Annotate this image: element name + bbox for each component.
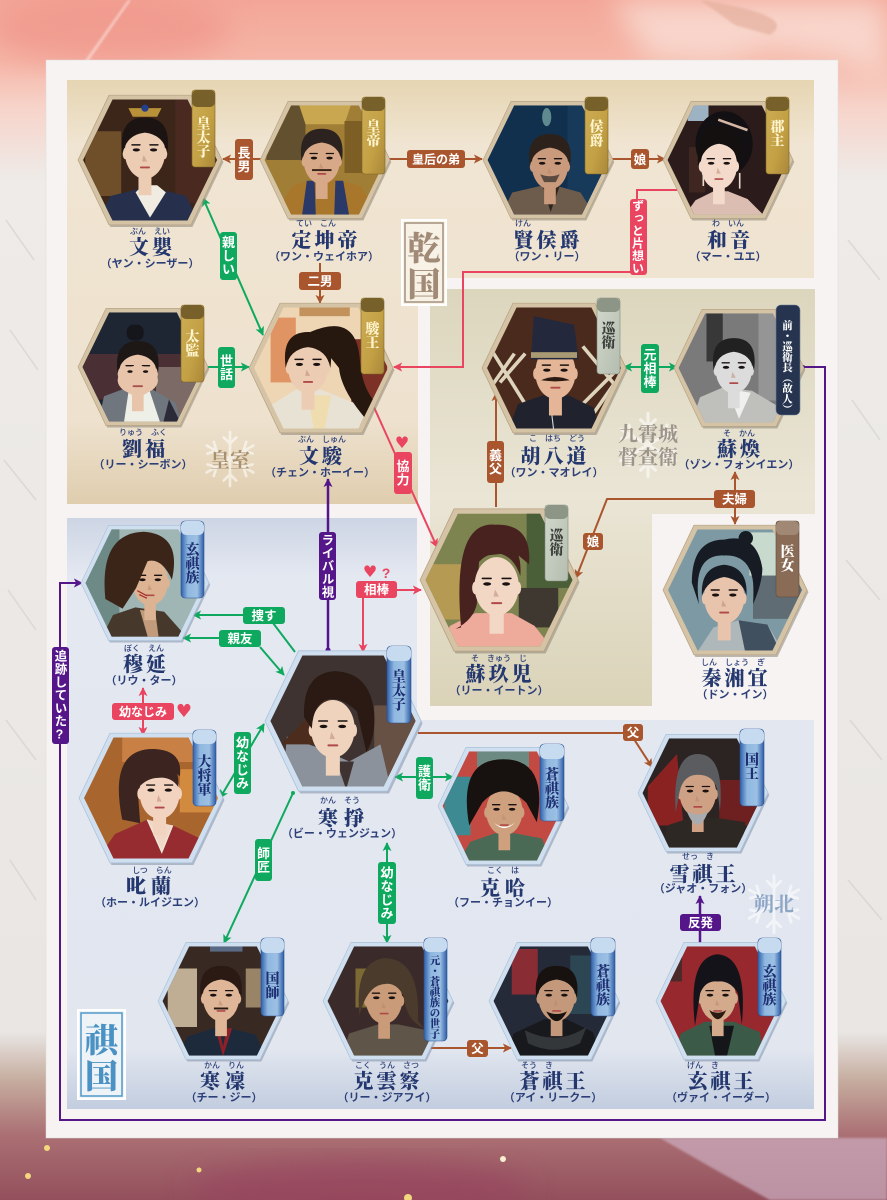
rank tag: 玄祺族 xyxy=(760,964,776,1007)
name: かん そう xyxy=(320,795,360,805)
name: そ きゅう じ xyxy=(471,653,527,663)
name xyxy=(450,653,548,697)
connector: 父 to 雪祺王: 父 xyxy=(627,726,640,740)
character: 定坤帝 xyxy=(260,97,391,263)
name xyxy=(94,427,192,471)
connector: 師匠: 師匠 xyxy=(255,846,270,874)
panel: Qi kingdom xyxy=(67,518,814,1109)
name: こ はち どう xyxy=(529,433,585,443)
name: （リー・シーボン） xyxy=(94,458,192,471)
section label: 九霄城督査衛: 九霄城 xyxy=(618,422,678,446)
connector: 幼なじみ red: ♥ xyxy=(176,701,192,722)
rank tag: 巡衛 xyxy=(600,321,616,350)
portrait xyxy=(323,942,454,1061)
connector: 夫婦 xyxy=(576,472,755,578)
portrait xyxy=(260,102,391,220)
name: けん xyxy=(515,219,531,228)
name: 定坤帝 xyxy=(292,229,360,252)
character: 賢侯爵 xyxy=(483,97,614,263)
name: 文嬰 xyxy=(129,236,175,259)
connector: 協力: ♥ xyxy=(395,433,409,452)
name xyxy=(696,657,774,701)
connector: 幼なじみ green xyxy=(220,724,264,798)
rank tag xyxy=(424,938,447,1041)
connector: 夫婦: 夫婦 xyxy=(722,492,747,506)
name: 蘇煥 xyxy=(717,438,763,461)
connector: 世話: 世話 xyxy=(218,354,233,382)
portrait xyxy=(674,310,805,428)
name: （マー・ユエ） xyxy=(690,250,766,263)
name: 克雲察 xyxy=(354,1069,422,1093)
name: （リウ・ター） xyxy=(106,674,182,687)
section label: 九霄城督査衛 xyxy=(618,414,678,476)
connector: 父 to 雪祺王 xyxy=(418,724,652,767)
character: 胡八道 xyxy=(482,298,627,479)
connector: 娘: 娘 xyxy=(634,152,647,167)
portrait xyxy=(79,733,224,865)
name: こく は xyxy=(487,866,519,875)
rank tag xyxy=(776,521,799,597)
rank tag: 皇太子 xyxy=(194,115,210,158)
name: （ワン・ウェイホア） xyxy=(269,250,379,263)
name: 和音 xyxy=(707,228,753,252)
name xyxy=(95,866,205,909)
rank tag: 前・巡衛長（故人） xyxy=(780,319,792,414)
name: 叱蘭 xyxy=(126,875,176,898)
connector: 父 to 蒼祺王: 父 xyxy=(471,1042,484,1056)
connector: 幼なじみ vertical xyxy=(378,843,396,943)
name: そ かん xyxy=(723,429,755,438)
connector: 片想い: ずっと片想い xyxy=(630,198,644,274)
panel: Jiuxiao city inspectorate xyxy=(430,289,815,706)
name: （ビー・ウェンジュン） xyxy=(282,826,402,840)
connector: ライバル視: ライバル視 xyxy=(320,534,334,598)
name: せっ き xyxy=(682,852,714,861)
character: 文駿 xyxy=(249,298,394,479)
rank tag xyxy=(585,97,608,174)
character: 寒掙 xyxy=(265,646,423,840)
name xyxy=(106,643,182,687)
name: げん き xyxy=(687,1060,719,1070)
name xyxy=(508,219,586,263)
name: しつ らん xyxy=(132,866,172,875)
name: 文駿 xyxy=(299,445,345,468)
character: 穆延 xyxy=(81,521,210,687)
name: 劉福 xyxy=(122,437,168,461)
label: pursuit: 追跡していた? xyxy=(52,648,67,742)
section label: 乾国: 国 xyxy=(408,267,440,304)
character: 劉福 xyxy=(78,305,209,471)
rank tag: 元・蒼祺族の世子 xyxy=(428,954,440,1039)
name: ぶん しゅん xyxy=(298,435,346,444)
rank tag xyxy=(387,646,411,723)
character: 秦湘宜 xyxy=(663,521,808,701)
rank tag: 皇太子 xyxy=(390,668,406,711)
purple border connector: pursuit xyxy=(52,365,825,1120)
name: 寒凜 xyxy=(200,1069,250,1093)
rank tag: 侯爵 xyxy=(588,118,604,148)
rank tag xyxy=(181,521,204,598)
connector: 元相棒 xyxy=(624,344,677,393)
name: （ワン・マオレイ） xyxy=(504,466,604,479)
rank tag xyxy=(192,90,215,167)
section label: 祺国 xyxy=(78,1010,125,1099)
connector: 親友 xyxy=(183,630,284,675)
rank tag xyxy=(758,938,781,1016)
name: てい こん xyxy=(296,219,336,228)
name: かん りん xyxy=(204,1061,244,1070)
name: 賢侯爵 xyxy=(514,228,582,252)
connector: 長男 xyxy=(223,139,261,180)
connector: 幼なじみ red xyxy=(112,688,192,735)
rank tag: 大将軍 xyxy=(196,753,212,797)
name: 雪祺王 xyxy=(670,862,738,886)
portrait xyxy=(638,734,769,853)
section label: 九霄城督査衛: 督查衛 xyxy=(618,446,678,469)
name: 蒼祺王 xyxy=(520,1069,588,1093)
section label: 乾国: 乾 xyxy=(408,231,440,268)
rank tag: 蒼祺族 xyxy=(594,963,610,1007)
portrait xyxy=(158,942,289,1061)
rank tag xyxy=(361,298,384,374)
portrait xyxy=(265,651,423,794)
name: 玄祺王 xyxy=(688,1069,756,1093)
character: 雪祺王 xyxy=(638,729,769,895)
character: 克哈 xyxy=(438,744,569,909)
name xyxy=(282,795,402,840)
character: 玄祺王 xyxy=(656,938,787,1104)
name xyxy=(269,219,379,263)
section label: 乾国 xyxy=(402,220,446,305)
connector: 反発 xyxy=(680,896,721,945)
portrait xyxy=(483,102,614,220)
name: （ワン・リー） xyxy=(508,250,586,263)
connector: 世話 xyxy=(207,347,249,388)
connector: ライバル視 xyxy=(319,479,336,652)
connector: 親しい: 親しい xyxy=(220,235,235,276)
connector: 親しい xyxy=(203,198,263,335)
name: 穆延 xyxy=(123,652,169,676)
portrait xyxy=(489,942,620,1061)
name: （アイ・リークー） xyxy=(504,1091,602,1104)
portrait xyxy=(78,95,223,227)
name xyxy=(654,852,752,895)
connector: 協力 xyxy=(373,405,437,547)
rank tag: 国王 xyxy=(743,751,759,780)
name: （チェン・ホーイー） xyxy=(265,466,375,479)
connector: 相棒: ♥ xyxy=(363,562,377,581)
character: 蘇玖児 xyxy=(420,505,580,697)
connector: 捜す: 捜す xyxy=(251,608,277,623)
connector: 二男: 二男 xyxy=(307,274,333,288)
name: そう き xyxy=(521,1060,553,1070)
connector: 護衛: 護衛 xyxy=(416,764,431,792)
portrait xyxy=(438,748,569,866)
connector: 父 to 蒼祺王 xyxy=(430,1040,511,1057)
section label: 朔北: 朔北 xyxy=(754,893,794,916)
name: （フー・チョンイー） xyxy=(448,896,558,909)
name: 寒掙 xyxy=(318,806,370,830)
rank tag xyxy=(193,730,216,806)
connector: 師匠 xyxy=(224,791,295,943)
connector: 相棒: 相棒 xyxy=(364,582,389,597)
character: 寒凜 xyxy=(158,938,289,1104)
name: （ヤン・シーザー） xyxy=(101,257,199,270)
rank tag: 蒼祺族 xyxy=(543,766,559,810)
rank tag: 医女 xyxy=(778,543,794,573)
connector: 片想い xyxy=(394,190,677,367)
connector: 幼なじみ vertical: 幼なじみ xyxy=(378,866,394,920)
connector: 幼なじみ green: 幼なじみ xyxy=(234,736,249,790)
connector: 義父 xyxy=(487,393,504,507)
name: （ドン・イン） xyxy=(696,688,774,701)
connector: 皇后の弟 xyxy=(388,150,482,168)
rank tag xyxy=(540,744,564,821)
name: 蘇玖児 xyxy=(466,663,534,686)
section label: 祺国: 祺 xyxy=(85,1023,121,1060)
rank tag: 駿王 xyxy=(364,320,380,349)
name xyxy=(504,1060,602,1104)
name: ぶん えい xyxy=(130,227,170,236)
connector: 親友: 親友 xyxy=(227,631,253,646)
section label: 朔北 xyxy=(749,876,799,932)
connector: 元相棒: 元相棒 xyxy=(642,348,656,390)
name: （ヴァイ・イーダー） xyxy=(666,1090,776,1104)
name: （ゾン・フォンイエン） xyxy=(679,458,799,471)
rank tag: 国師 xyxy=(264,970,280,1000)
rank tag xyxy=(776,305,800,415)
name xyxy=(504,433,604,479)
rank tag xyxy=(740,729,764,806)
panel: Qian kingdom imperial family xyxy=(67,80,814,504)
section label: 祺国: 国 xyxy=(85,1059,118,1096)
portrait xyxy=(81,525,210,643)
rank tag xyxy=(545,505,568,581)
name: りゅう ふく xyxy=(119,427,167,437)
name xyxy=(679,429,799,471)
rank tag xyxy=(591,938,615,1016)
connector: 長男: 長男 xyxy=(236,146,250,174)
rank tag: 皇帝 xyxy=(364,118,380,148)
character: 蒼祺王 xyxy=(489,938,620,1104)
name: （チー・ジー） xyxy=(186,1091,262,1104)
name: （ホー・ルイジエン） xyxy=(95,896,205,909)
connector: 二男 xyxy=(299,263,341,303)
connector: 捜す xyxy=(193,607,295,652)
portrait xyxy=(78,308,209,427)
rank tag: 玄祺族 xyxy=(184,542,200,585)
rank tag xyxy=(766,97,789,174)
rank tag: 巡衛 xyxy=(548,528,564,557)
section label: 皇室 xyxy=(207,432,253,486)
connector: 皇后の弟: 皇后の弟 xyxy=(412,152,460,166)
name xyxy=(448,866,558,909)
name: （リー・イートン） xyxy=(450,684,548,697)
name: （ジャオ・フォン） xyxy=(654,882,752,895)
character: 文嬰 xyxy=(78,90,223,270)
rank tag: 郡主 xyxy=(768,119,784,147)
portrait xyxy=(249,303,394,435)
portrait xyxy=(663,102,794,220)
character: 和音 xyxy=(663,97,794,263)
portrait xyxy=(656,942,787,1061)
name xyxy=(338,1060,436,1104)
name xyxy=(186,1061,262,1104)
name: こく うん さつ xyxy=(355,1060,419,1070)
name xyxy=(101,227,199,270)
name xyxy=(690,219,766,263)
name: 秦湘宜 xyxy=(702,666,770,690)
rank tag xyxy=(362,97,385,174)
rank tag: 太監 xyxy=(184,328,200,357)
character: 叱蘭 xyxy=(79,730,224,909)
name: （リー・ジアフイ） xyxy=(338,1091,436,1104)
character: 蘇煥 xyxy=(674,305,805,471)
connector: 義父: 義父 xyxy=(487,448,502,476)
name xyxy=(666,1060,776,1104)
connector: 幼なじみ red: 幼なじみ xyxy=(119,704,167,719)
connector: 反発: 反発 xyxy=(688,916,713,930)
name: 克哈 xyxy=(480,876,530,900)
name: 胡八道 xyxy=(520,445,590,468)
connector: 協力: 協力 xyxy=(394,459,410,487)
rank tag xyxy=(261,938,284,1016)
connector: 娘 xyxy=(611,149,665,169)
portrait xyxy=(663,525,808,657)
name xyxy=(265,435,375,479)
name: ぼく えん xyxy=(124,643,164,653)
portrait xyxy=(420,509,580,653)
name: わ いん xyxy=(712,219,744,228)
name: しん しょう ぎ xyxy=(701,657,765,667)
connector: 護衛 xyxy=(395,757,453,799)
character: 克雲察 xyxy=(323,938,454,1104)
connector: 相棒 xyxy=(356,562,421,652)
connector: 相棒: ? xyxy=(382,565,390,581)
portrait xyxy=(482,303,627,435)
rank tag xyxy=(181,305,204,382)
connector: 夫婦: 娘 xyxy=(587,534,600,549)
rank tag xyxy=(597,298,620,374)
section label: 皇室: 皇室 xyxy=(210,448,250,472)
